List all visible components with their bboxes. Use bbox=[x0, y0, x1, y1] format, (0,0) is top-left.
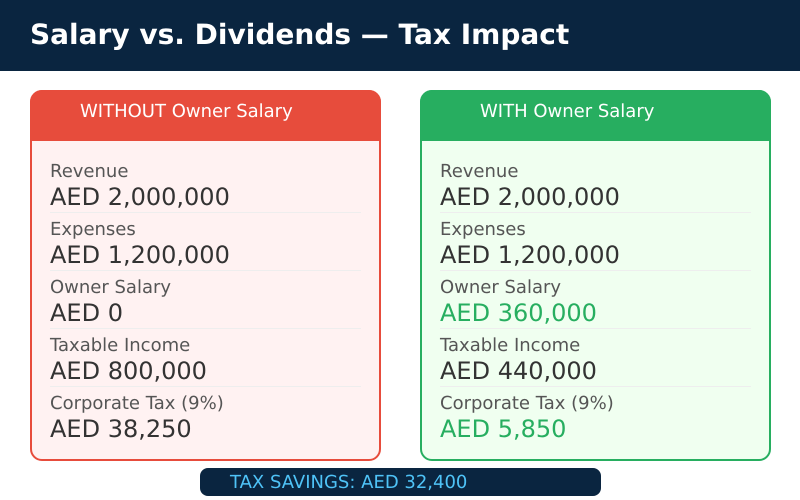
callout: tax savings bbox=[200, 468, 601, 496]
row: expenses bbox=[50, 213, 361, 271]
row: corporate tax: AED 38,250 bbox=[50, 415, 192, 443]
row: corporate tax bbox=[440, 393, 614, 443]
row: expenses bbox=[440, 213, 751, 271]
panel heading: with bbox=[420, 90, 771, 141]
row: expenses: AED 1,200,000 bbox=[50, 241, 230, 269]
row: corporate tax: Corporate Tax (9%) bbox=[440, 393, 614, 414]
title: Salary vs. Dividends — Tax Impact bbox=[30, 18, 569, 50]
row: expenses: AED 1,200,000 bbox=[440, 241, 620, 269]
row: revenue: AED 2,000,000 bbox=[440, 183, 620, 211]
row: revenue bbox=[440, 155, 751, 213]
panel heading: without: WITHOUT Owner Salary bbox=[80, 101, 293, 122]
row: corporate tax bbox=[50, 393, 224, 443]
row: owner salary: AED 0 bbox=[50, 299, 123, 327]
row: revenue: AED 2,000,000 bbox=[50, 183, 230, 211]
row: revenue bbox=[50, 155, 361, 213]
row: corporate tax: Corporate Tax (9%) bbox=[50, 393, 224, 414]
row: revenue: Revenue bbox=[50, 161, 128, 182]
panel heading: with: WITH Owner Salary bbox=[480, 101, 654, 122]
row: expenses: Expenses bbox=[440, 219, 526, 240]
row: revenue: Revenue bbox=[440, 161, 518, 182]
row: owner salary bbox=[440, 271, 751, 329]
row: owner salary bbox=[50, 271, 361, 329]
panel heading: without bbox=[30, 90, 381, 141]
row: expenses: Expenses bbox=[50, 219, 136, 240]
row: taxable income: Taxable Income bbox=[50, 335, 190, 356]
row: owner salary: Owner Salary bbox=[440, 277, 561, 298]
row: owner salary: AED 360,000 bbox=[440, 299, 597, 327]
title banner bbox=[0, 0, 800, 71]
row: taxable income bbox=[50, 329, 361, 387]
row: corporate tax: AED 5,850 bbox=[440, 415, 566, 443]
row: taxable income: AED 440,000 bbox=[440, 357, 597, 385]
panel: without owner salary bbox=[30, 90, 381, 461]
row: taxable income bbox=[440, 329, 751, 387]
row: taxable income: Taxable Income bbox=[440, 335, 580, 356]
callout: tax savings: TAX SAVINGS: AED 32,400 bbox=[230, 472, 467, 493]
row: owner salary: Owner Salary bbox=[50, 277, 171, 298]
panel: with owner salary bbox=[420, 90, 771, 461]
row: taxable income: AED 800,000 bbox=[50, 357, 207, 385]
